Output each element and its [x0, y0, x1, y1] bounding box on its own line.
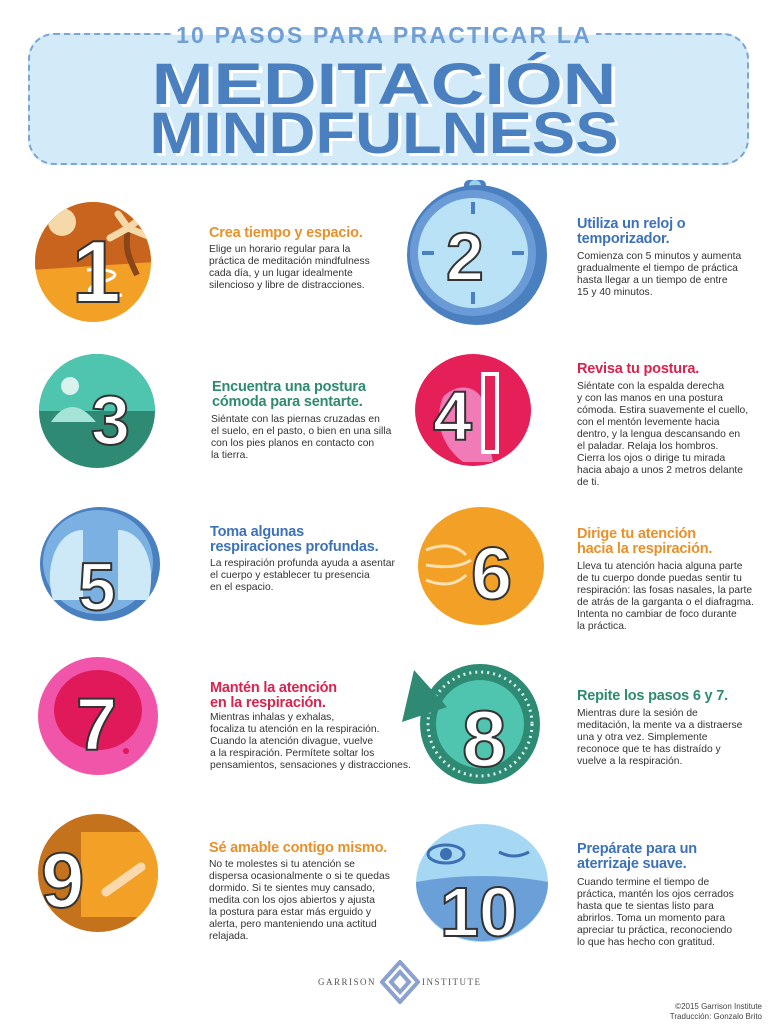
- icon 4: 4: [433, 377, 472, 455]
- heading 2: temporizador.: [577, 231, 669, 247]
- text 6: de atrás de la garganta o el diafragma.: [577, 597, 754, 608]
- text 4: cómoda. Estira suavemente el cuello,: [577, 405, 748, 416]
- title box: [28, 33, 749, 165]
- subtitle: 10 PASOS PARA PRACTICAR LA: [176, 22, 592, 48]
- text 3: Siéntate con las piernas cruzadas en: [211, 414, 380, 425]
- text 6: respiración: las fosas nasales, la parte: [577, 585, 752, 596]
- icon 1: [35, 202, 151, 322]
- text 4: con el mentón levemente hacia: [577, 417, 720, 428]
- text 9: relajada.: [209, 931, 248, 942]
- icon 8: [402, 664, 540, 784]
- heading 3: [212, 379, 366, 410]
- text 1: práctica de meditación mindfulness: [209, 256, 370, 267]
- title line 2: MINDFULNESS: [149, 101, 619, 166]
- text 9: dormido. Si te sientes muy cansado,: [209, 883, 375, 894]
- icon 5: 5: [78, 549, 116, 623]
- heading 5: Toma algunas: [210, 524, 304, 540]
- text 6: Lleva tu atención hacia alguna parte: [577, 561, 742, 572]
- heading 6: Dirige tu atención: [577, 526, 696, 542]
- credits: ©2015 Garrison Institute: [675, 1002, 762, 1011]
- text 4: dentro, y la lengua descansando en: [577, 429, 740, 440]
- icon 8: 8: [462, 694, 506, 783]
- text 4: y con las manos en una postura: [577, 393, 723, 404]
- text 10: práctica, mantén los ojos cerrados: [577, 889, 734, 900]
- text 10: apreciar tu práctica, reconociendo: [577, 925, 732, 936]
- text 2: hasta llegar a un tiempo de entre: [577, 275, 728, 286]
- text 4: Cierra los ojos o dirige tu mirada: [577, 453, 725, 464]
- text 2: Comienza con 5 minutos y aumenta: [577, 251, 741, 262]
- icon 3: 3: [91, 381, 130, 459]
- icon 2: 2: [446, 219, 484, 295]
- icon 9: [38, 814, 158, 932]
- icon 2: [407, 180, 547, 325]
- heading 5: [210, 524, 378, 555]
- icon 10: [416, 824, 548, 944]
- heading 5: respiraciones profundas.: [210, 539, 378, 555]
- heading 7: en la respiración.: [210, 695, 326, 711]
- text 1: [209, 244, 370, 291]
- heading 1: Crea tiempo y espacio.: [209, 225, 363, 241]
- text 7: a la respiración. Permítete soltar los: [210, 748, 374, 759]
- text 10: Cuando termine el tiempo de: [577, 877, 709, 888]
- text 4: hacia abajo a unos 2 metros delante: [577, 465, 743, 476]
- text 7: Cuando la atención divague, vuelve: [210, 736, 373, 747]
- text 8: Mientras dure la sesión de: [577, 708, 698, 719]
- text 5: [210, 558, 395, 593]
- text 7: pensamientos, sensaciones y distracciones.: [210, 760, 411, 771]
- text 9: [209, 859, 390, 942]
- text 9: alerta, pero manteniendo una actitud: [209, 919, 377, 930]
- text 7: focaliza tu atención en la respiración.: [210, 724, 379, 735]
- credits: [670, 1002, 762, 1021]
- text 4: Siéntate con la espalda derecha: [577, 381, 724, 392]
- text 7: [210, 712, 411, 771]
- text 3: la tierra.: [211, 450, 248, 461]
- heading 7: [210, 680, 337, 711]
- icon: knot logo: [380, 960, 420, 1004]
- text 3: con los pies planos en contacto con: [211, 438, 374, 449]
- footer logo: GARRISON: [318, 977, 376, 987]
- text 6: la práctica.: [577, 621, 627, 632]
- text 3: el suelo, en el pasto, o bien en una silla: [211, 426, 391, 437]
- text 1: cada día, y un lugar idealmente: [209, 268, 353, 279]
- text 9: medita con los ojos abiertos y ajusta: [209, 895, 375, 906]
- heading 2: Utiliza un reloj o: [577, 216, 685, 232]
- footer logo: INSTITUTE: [422, 977, 482, 987]
- text 8: una y otra vez. Simplemente: [577, 732, 708, 743]
- text 7: Mientras inhalas y exhalas,: [210, 712, 334, 723]
- text 10: hasta que te sientas listo para: [577, 901, 714, 912]
- heading 8: Repite los pasos 6 y 7.: [577, 688, 728, 704]
- text 5: en el espacio.: [210, 582, 274, 593]
- credits: Traducción: Gonzalo Brito: [670, 1012, 762, 1021]
- footer logo: [318, 960, 482, 1004]
- heading 7: Mantén la atención: [210, 680, 337, 696]
- heading 3: Encuentra una postura: [212, 379, 366, 395]
- heading 10: [577, 841, 697, 872]
- text 4: de ti.: [577, 477, 599, 488]
- text 4: [577, 381, 748, 488]
- text 6: Intenta no cambiar de foco durante: [577, 609, 737, 620]
- icon 6: [418, 507, 544, 625]
- icon 7: [38, 657, 158, 775]
- text 10: [577, 877, 734, 948]
- text 10: lo que has hecho con gratitud.: [577, 937, 715, 948]
- text 5: La respiración profunda ayuda a asentar: [210, 558, 395, 569]
- heading 10: Prepárate para un: [577, 841, 697, 857]
- text 8: meditación, la mente va a distraerse: [577, 720, 742, 731]
- text 5: el cuerpo y establecer tu presencia: [210, 570, 370, 581]
- heading 3: cómoda para sentarte.: [212, 394, 363, 410]
- heading 2: [577, 216, 685, 247]
- icon 7: 7: [76, 683, 117, 766]
- icon 6: 6: [471, 532, 512, 615]
- heading 9: Sé amable contigo mismo.: [209, 840, 387, 856]
- text 8: [577, 708, 742, 767]
- text 4: el paladar. Relaja los hombros.: [577, 441, 718, 452]
- text 9: dispersa ocasionalmente o si te quedas: [209, 871, 390, 882]
- text 10: abrirlos. Toma un momento para: [577, 913, 725, 924]
- text 2: 15 y 40 minutos.: [577, 287, 653, 298]
- icon 5: [40, 507, 160, 623]
- text 9: la postura para estar más erguido y: [209, 907, 371, 918]
- heading 10: aterrizaje suave.: [577, 856, 686, 872]
- icon 9: 9: [41, 836, 84, 924]
- icon 4: [415, 354, 531, 466]
- heading 4: Revisa tu postura.: [577, 361, 699, 377]
- heading 6: hacia la respiración.: [577, 541, 712, 557]
- heading 6: [577, 526, 712, 557]
- title line 1: MEDITACIÓN: [152, 52, 616, 117]
- text 8: reconoce que te has distraído y: [577, 744, 721, 755]
- text 2: gradualmente el tiempo de práctica: [577, 263, 738, 274]
- text 1: silencioso y libre de distracciones.: [209, 280, 365, 291]
- text 9: No te molestes si tu atención se: [209, 859, 355, 870]
- text 1: Elige un horario regular para la: [209, 244, 350, 255]
- icon 3: [39, 354, 155, 468]
- text 3: [211, 414, 392, 461]
- text 6: [577, 561, 754, 632]
- text 6: de tu cuerpo donde puedas sentir tu: [577, 573, 742, 584]
- icon 1: 1: [72, 222, 121, 321]
- text 2: [577, 251, 742, 298]
- text 8: vuelve a la respiración.: [577, 756, 682, 767]
